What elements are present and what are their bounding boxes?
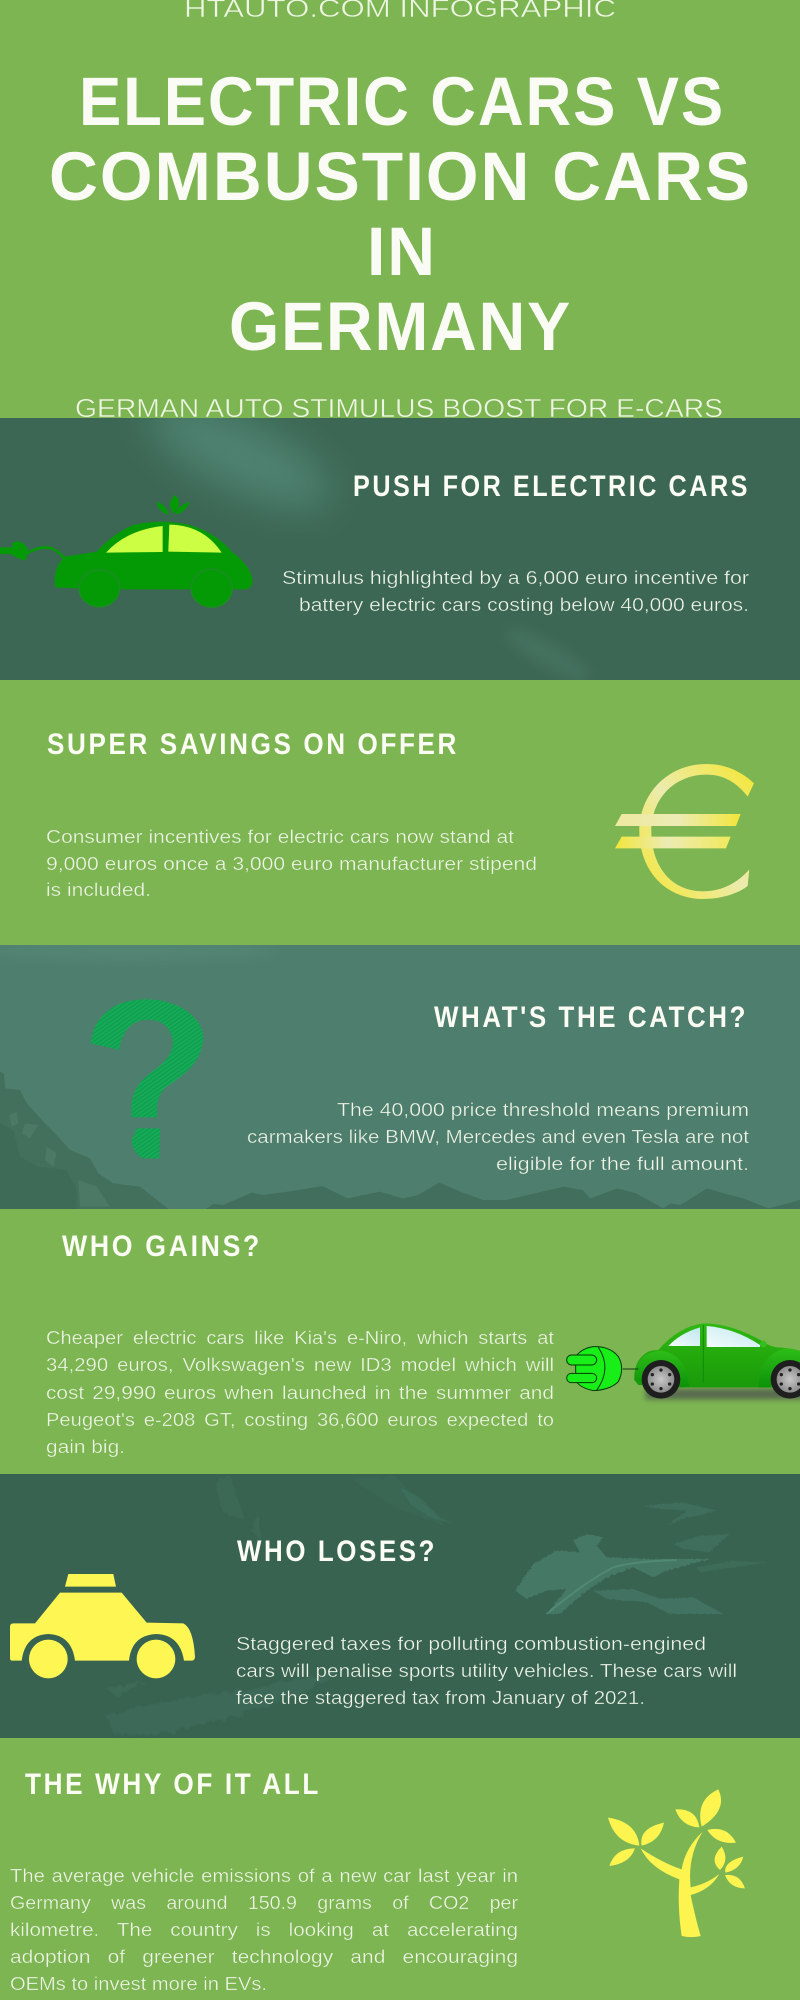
title: COMBUSTION CARS xyxy=(49,138,752,215)
icon: yellow taxi xyxy=(10,1574,195,1678)
body text xyxy=(46,826,537,900)
body text: eligible for the full amount. xyxy=(496,1153,749,1174)
panel: the why of it all xyxy=(10,1768,745,1994)
panel: what's the catch xyxy=(0,938,800,1209)
heading: WHO GAINS? xyxy=(62,1230,262,1263)
body text: The average vehicle emissions of a new car last year in xyxy=(10,1865,518,1886)
heading: SUPER SAVINGS ON OFFER xyxy=(47,728,459,761)
body text: battery electric cars costing below 40,000 euros. xyxy=(299,594,749,615)
heading: WHAT'S THE CATCH? xyxy=(434,1001,748,1034)
body text xyxy=(247,1099,749,1174)
body text xyxy=(282,567,749,615)
panel: super savings on offer xyxy=(46,728,754,900)
panel: who loses xyxy=(0,1474,800,1738)
body text xyxy=(10,1865,518,1994)
icon: green electric car with plug and leaves xyxy=(0,495,253,607)
subtitle: GERMAN AUTO STIMULUS BOOST FOR E-CARS xyxy=(75,393,723,423)
body text: adoption of greener technology and encouraging xyxy=(10,1946,518,1967)
icon: green car with plug xyxy=(567,1323,800,1399)
title: GERMANY xyxy=(229,288,572,365)
body text: The 40,000 price threshold means premium xyxy=(337,1099,749,1120)
body text: is included. xyxy=(46,879,151,900)
heading: WHO LOSES? xyxy=(237,1535,437,1568)
body text: OEMs to invest more in EVs. xyxy=(10,1973,267,1994)
body text: Peugeot's e-208 GT, costing 36,600 euros expected to xyxy=(46,1409,554,1430)
body text: face the staggered tax from January of 2021. xyxy=(236,1687,645,1708)
body text: Stimulus highlighted by a 6,000 euro incentive for xyxy=(282,567,749,588)
body text: cars will penalise sports utility vehicles. These cars will xyxy=(236,1660,737,1681)
body text: Consumer incentives for electric cars now stand at xyxy=(46,826,514,847)
header xyxy=(49,0,752,423)
body text: Cheaper electric cars like Kia's e-Niro, which starts at xyxy=(46,1327,554,1348)
body text: 9,000 euros once a 3,000 euro manufacturer stipend xyxy=(46,853,537,874)
body text: kilometre. The country is looking at accelerating xyxy=(10,1919,518,1940)
icon: question mark xyxy=(91,999,203,1158)
body text: Germany was around 150.9 grams of CO2 per xyxy=(10,1892,518,1913)
body text: carmakers like BMW, Mercedes and even Tesla are not xyxy=(247,1126,749,1147)
heading: THE WHY OF IT ALL xyxy=(25,1768,321,1801)
icon: euro sign xyxy=(615,764,754,899)
body text xyxy=(46,1327,554,1457)
icon: yellow tree xyxy=(608,1789,745,1937)
panel: push for electric cars xyxy=(0,418,800,680)
title xyxy=(49,63,752,365)
title: ELECTRIC CARS VS xyxy=(79,63,725,140)
body text: Staggered taxes for polluting combustion-engined xyxy=(236,1633,706,1654)
body text: cost 29,990 euros when launched in the summer and xyxy=(46,1382,554,1403)
title: IN xyxy=(367,213,437,290)
body text xyxy=(236,1633,737,1708)
body text: gain big. xyxy=(46,1436,125,1457)
panel: who gains xyxy=(46,1230,800,1457)
body text: 34,290 euros, Volkswagen's new ID3 model which will xyxy=(46,1354,554,1375)
